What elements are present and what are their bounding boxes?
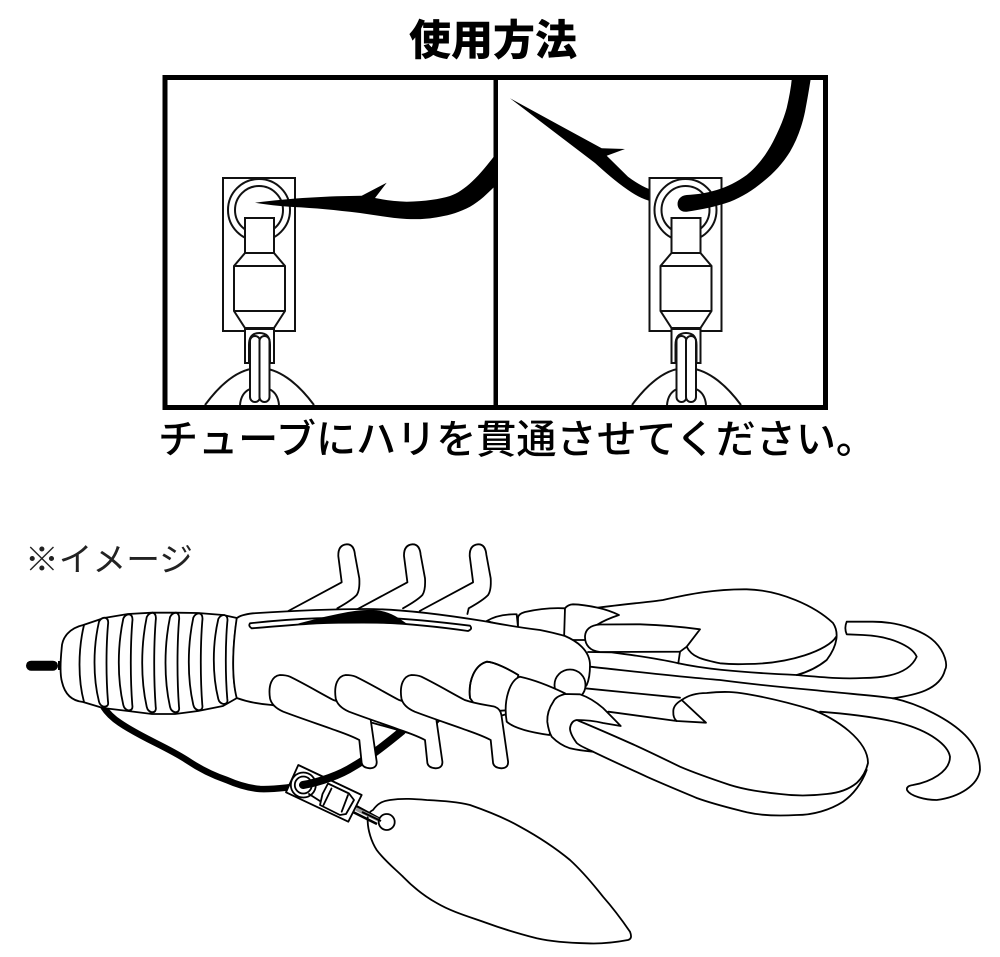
image note: ※イメージ: [25, 541, 193, 578]
small swivel: [286, 765, 395, 830]
icon: left hook: [255, 155, 495, 219]
caption: チューブにハリを貫通させてください。: [158, 418, 876, 462]
hook inside body: [298, 610, 408, 624]
tail tentacles: [585, 622, 980, 800]
icon: right swivel: [650, 178, 722, 402]
back segments: [487, 604, 619, 640]
lure body: [233, 609, 590, 737]
rear joint: [470, 662, 621, 752]
lower claw: [578, 692, 868, 816]
title: 使用方法: [409, 17, 577, 64]
panel: right step, hook through swivel: [497, 77, 825, 407]
icon: right blade: [632, 368, 741, 405]
hook shank wire: [103, 707, 292, 789]
illustration: lure rigged with blade: [31, 544, 980, 944]
hook point tip: [31, 661, 59, 670]
icon: left swivel: [223, 178, 295, 402]
icon: right hook point: [510, 98, 649, 201]
icon: right hook shank: [678, 77, 811, 212]
body slit: [249, 618, 471, 631]
panel frame: [165, 77, 826, 408]
upper claw: [585, 589, 837, 675]
hook through swivel eye: [303, 731, 402, 785]
lure head ribs: [60, 613, 237, 714]
panel: left step, hook approaching swivel: [165, 77, 495, 407]
icon: left blade: [205, 368, 314, 405]
blade: [368, 799, 631, 944]
front legs: [269, 675, 508, 768]
back legs: [288, 544, 491, 614]
